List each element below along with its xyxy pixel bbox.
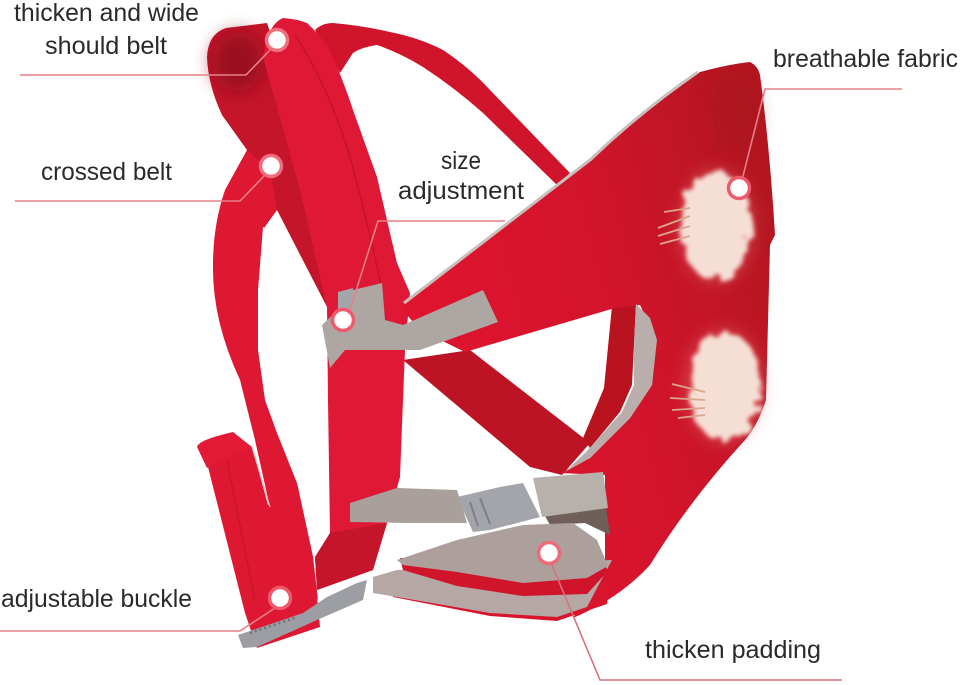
rear side strap in the window	[583, 304, 636, 448]
main shoulder belt	[263, 18, 410, 590]
label: size adjustment: adjustment	[398, 177, 524, 205]
callout line: breathable fabric	[742, 89, 902, 180]
size adjustment webbing	[322, 283, 498, 368]
label: size adjustment	[398, 147, 524, 205]
cross strap behind the window	[403, 350, 590, 475]
thicken padding seat	[397, 523, 608, 596]
marker: adjustable buckle	[270, 588, 290, 608]
callout line: adjustable buckle	[0, 608, 275, 631]
callout line: crossed belt	[15, 175, 265, 201]
buckle side webbing	[533, 472, 608, 517]
label: size adjustment: size	[441, 147, 481, 175]
adjustable bottom buckle	[238, 580, 367, 648]
inner shoulder lining	[207, 23, 332, 307]
callout line: thicken padding	[552, 565, 842, 680]
carrier body with breathable panel	[400, 62, 775, 618]
padded lower strap tab	[197, 432, 320, 648]
callout line: thicken and wide should belt	[20, 50, 270, 75]
marker: shoulder belt	[266, 30, 288, 50]
label: crossed belt: crossed belt	[41, 158, 172, 186]
shadow under waist strap	[545, 506, 610, 535]
marker: thicken padding	[538, 542, 560, 564]
breathable air puffs	[658, 170, 762, 442]
marker: size adjustment	[332, 310, 354, 330]
label: thicken padding: thicken padding	[645, 636, 821, 664]
back strap	[315, 23, 570, 185]
callout line: size adjustment	[350, 221, 505, 310]
label: thicken and wide should belt: should belt	[45, 32, 167, 60]
plastic waist buckle	[457, 483, 540, 532]
label: breathable fabric: breathable fabric	[773, 45, 958, 73]
marker: crossed belt	[260, 156, 282, 176]
left crossed strap	[213, 150, 318, 600]
waist webbing strap	[350, 488, 467, 523]
label: adjustable buckle: adjustable buckle	[1, 585, 192, 613]
label: thicken and wide should belt	[14, 0, 199, 60]
seat lower mesh layer	[373, 560, 612, 621]
marker: breathable fabric	[728, 178, 750, 198]
